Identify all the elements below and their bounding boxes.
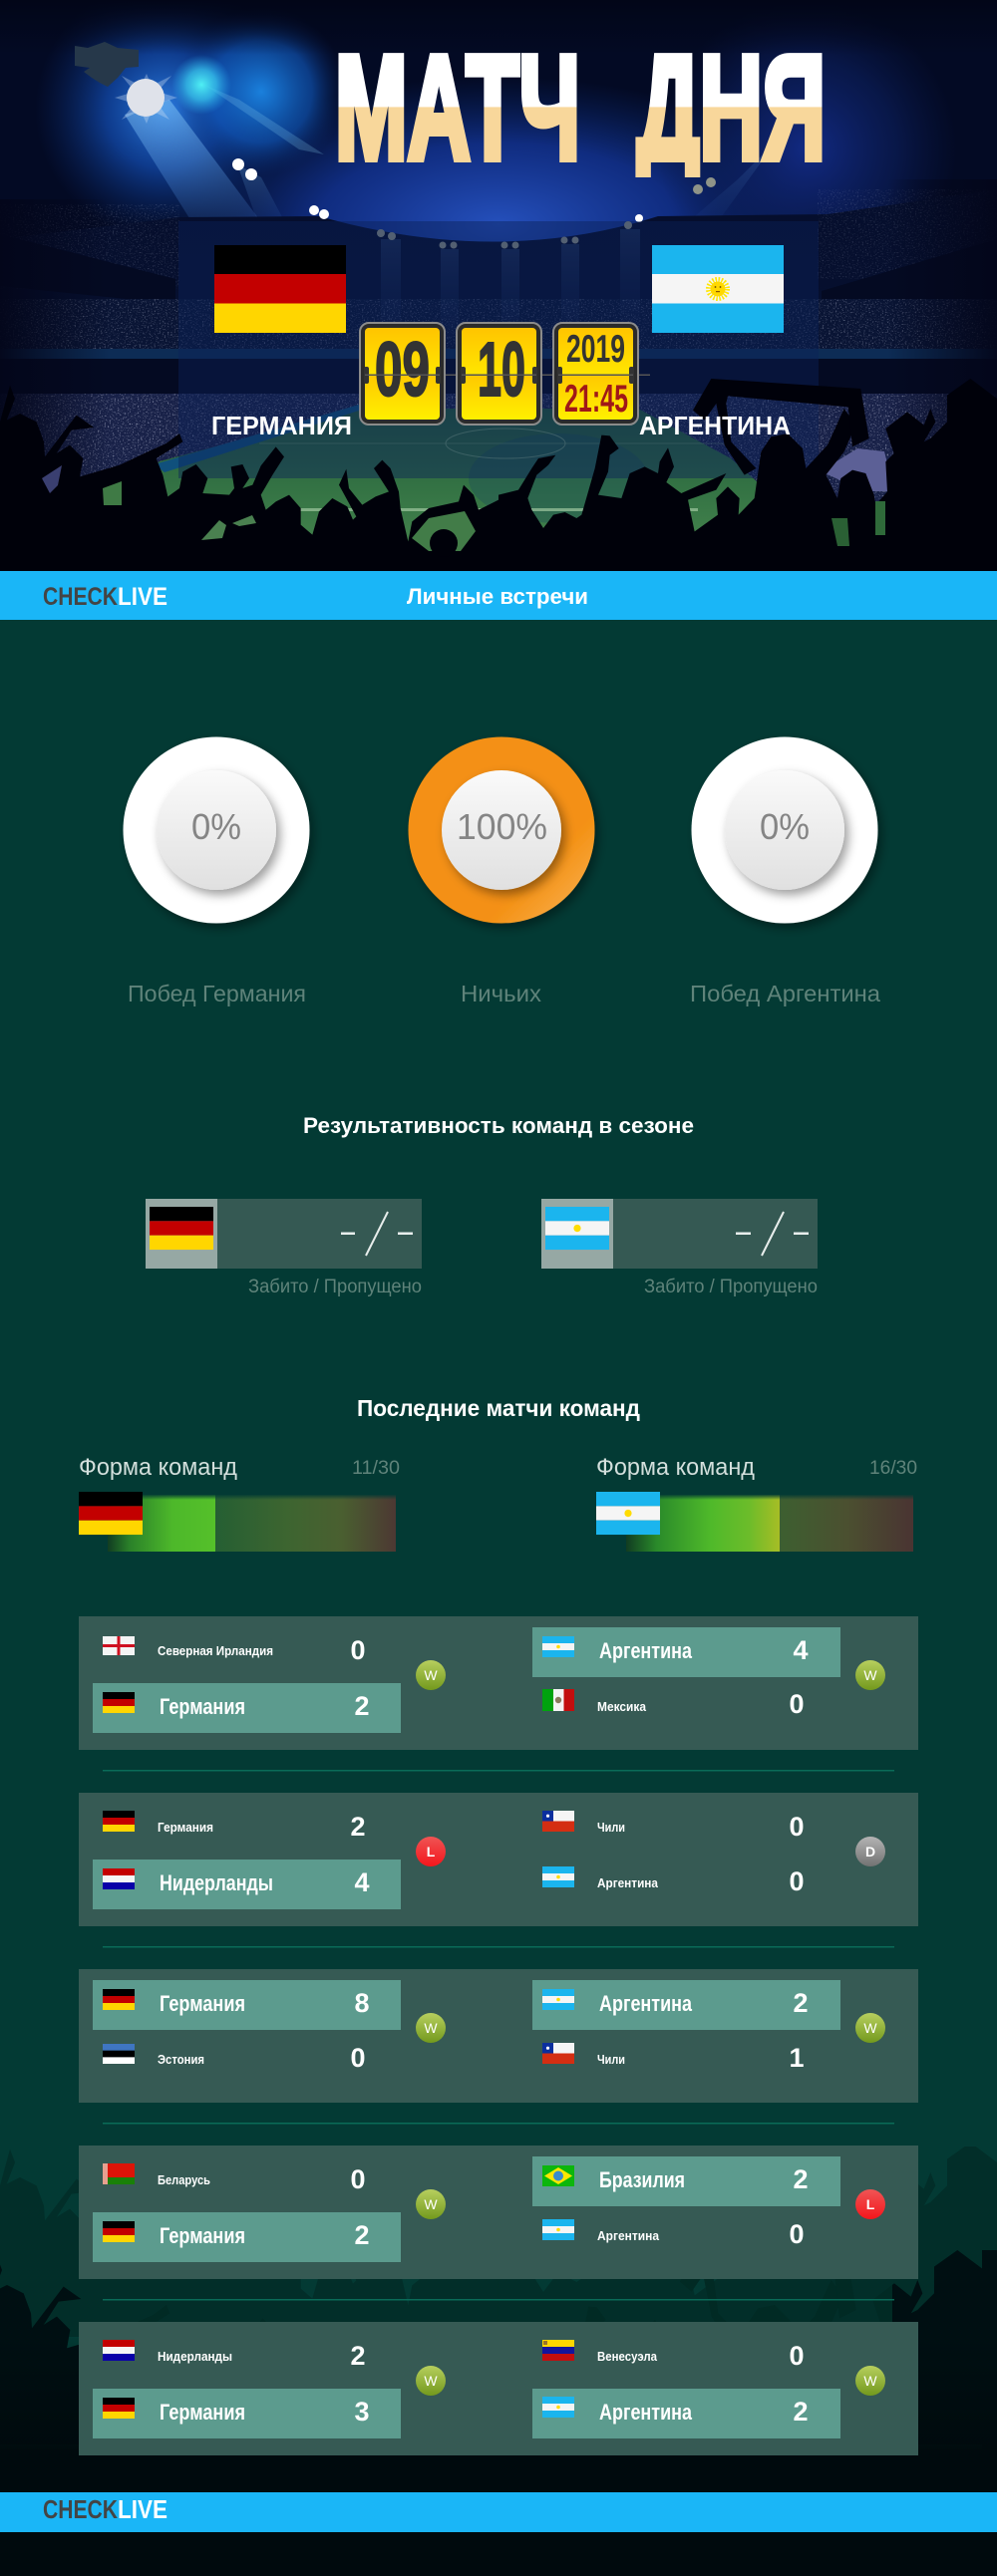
team name: Argentina: АРГЕНТИНА <box>639 411 791 440</box>
logo: CheckLive top: LIVE <box>118 583 167 611</box>
label: draws: Ничьих <box>461 981 542 1006</box>
match row 2: Германия <box>158 1820 213 1835</box>
match row 1: Аргентина <box>599 1638 693 1663</box>
match row 4: 0 <box>789 2219 805 2249</box>
title: МАТЧ <box>335 26 580 190</box>
bottom crowd background <box>0 2143 997 2493</box>
match row 3: 2 <box>793 1988 809 2018</box>
flip card: year and time: 21:45 <box>564 378 628 421</box>
match row 3: Аргентина <box>599 1991 693 2016</box>
match row 4 <box>79 2146 918 2279</box>
icon: handshake <box>75 42 139 87</box>
donut: Argentina wins: 0% <box>760 806 810 847</box>
match row 4: Бразилия <box>599 2167 685 2192</box>
match row 2: L <box>427 1844 436 1860</box>
match row 2: 0 <box>789 1866 805 1896</box>
match row 3 <box>79 1969 918 2103</box>
title: ДНЯ <box>637 26 826 190</box>
match row 4: Германия <box>160 2223 245 2248</box>
match row 5: 0 <box>789 2341 805 2371</box>
match row 5: W <box>863 2373 877 2389</box>
match row 5: 2 <box>793 2397 809 2427</box>
title <box>338 53 822 177</box>
flip card: month: 10 <box>478 327 525 413</box>
heading: season performance: Результативность команд в сезоне <box>303 1113 694 1138</box>
flip card: day <box>360 323 445 425</box>
match row 4: Беларусь <box>158 2172 210 2187</box>
flag: Argentina large <box>652 245 784 333</box>
match row 5: 2 <box>350 2341 366 2371</box>
form chart: Germany: Форма команд <box>79 1454 237 1481</box>
match row 2: Аргентина <box>597 1875 659 1890</box>
donut: Germany wins: 0% <box>191 806 241 847</box>
label: Argentina wins: Побед Аргентина <box>690 981 880 1006</box>
form chart: Argentina: 16/30 <box>869 1458 917 1479</box>
stat box: Germany <box>146 1199 422 1297</box>
heading: personal meetings: Личные встречи <box>407 584 588 609</box>
match row 1 <box>79 1616 918 1750</box>
flip card: day: 09 <box>375 327 430 413</box>
header crowd silhouette <box>0 379 997 573</box>
match row 2: 4 <box>354 1867 370 1897</box>
match row 1: W <box>863 1667 877 1683</box>
match row 4: 0 <box>350 2164 366 2194</box>
form chart: Argentina <box>596 1454 917 1552</box>
logo: CheckLive bottom: CHECK <box>43 2494 118 2524</box>
match row 5: 3 <box>354 2397 370 2427</box>
donut: Argentina wins <box>692 737 877 923</box>
flag: Germany large <box>214 245 346 333</box>
form chart: Argentina: Форма команд <box>596 1454 755 1481</box>
match row 5: W <box>424 2373 438 2389</box>
match row 4: 2 <box>354 2220 370 2250</box>
match row 1: 0 <box>789 1689 805 1719</box>
match row 2: 0 <box>789 1812 805 1842</box>
match row 3: Германия <box>160 1991 245 2016</box>
top blue bar <box>0 571 997 620</box>
heading: last matches: Последние матчи команд <box>357 1395 640 1421</box>
match row 2: Чили <box>597 1820 625 1835</box>
donut: Germany wins <box>124 737 309 923</box>
match row 1: 0 <box>350 1635 366 1665</box>
match row 1: Германия <box>160 1694 245 1719</box>
match row 1: 2 <box>354 1691 370 1721</box>
match row 3: 8 <box>354 1988 370 2018</box>
match row 3: 0 <box>350 2043 366 2073</box>
header stadium image <box>0 0 997 571</box>
flip card: year and time: 2019 <box>566 328 625 371</box>
match row 5: Нидерланды <box>158 2349 232 2364</box>
match row 4: 2 <box>793 2164 809 2194</box>
translucent match panel <box>178 221 819 478</box>
stat box: Germany: Забито / Пропущено <box>248 1277 422 1297</box>
match row 1: Северная Ирландия <box>158 1643 273 1658</box>
flip card: year and time <box>553 323 638 425</box>
match row 1: W <box>424 1667 438 1683</box>
match row 3: W <box>863 2020 877 2036</box>
donut: draws <box>409 737 594 923</box>
donut: draws: 100% <box>457 806 547 847</box>
match row 1: 4 <box>793 1635 809 1665</box>
main dark green section <box>0 620 997 2493</box>
match row 3: 1 <box>789 2043 805 2073</box>
match row 3: Чили <box>597 2052 625 2067</box>
match row 4: W <box>424 2196 438 2212</box>
flip card: month <box>457 323 541 425</box>
match row 5: Германия <box>160 2400 245 2425</box>
form chart: Germany: 11/30 <box>352 1458 400 1479</box>
match row 4: L <box>866 2196 875 2212</box>
stat box: Argentina: Забито / Пропущено <box>644 1277 818 1297</box>
spotlight flare <box>115 74 177 124</box>
match row 2: D <box>865 1844 875 1860</box>
match row 2: 2 <box>350 1812 366 1842</box>
bottom blue bar <box>0 2492 997 2532</box>
stat box: Argentina <box>541 1199 818 1297</box>
match row 1: Мексика <box>597 1699 647 1714</box>
match row 5: Венесуэла <box>597 2349 658 2364</box>
match row 2 <box>79 1793 918 1926</box>
label: Germany wins: Побед Германия <box>128 981 306 1006</box>
match row 2: Нидерланды <box>160 1870 273 1895</box>
team name: Germany: ГЕРМАНИЯ <box>211 411 352 440</box>
match row 5 <box>79 2322 918 2455</box>
date line <box>359 375 650 376</box>
logo: CheckLive top: CHECK <box>43 583 118 611</box>
match row 3: W <box>424 2020 438 2036</box>
match row 3: Эстония <box>158 2052 204 2067</box>
form chart: Germany <box>79 1454 400 1552</box>
match row 5: Аргентина <box>599 2400 693 2425</box>
logo: CheckLive bottom: LIVE <box>118 2494 167 2524</box>
match row 4: Аргентина <box>597 2228 660 2243</box>
